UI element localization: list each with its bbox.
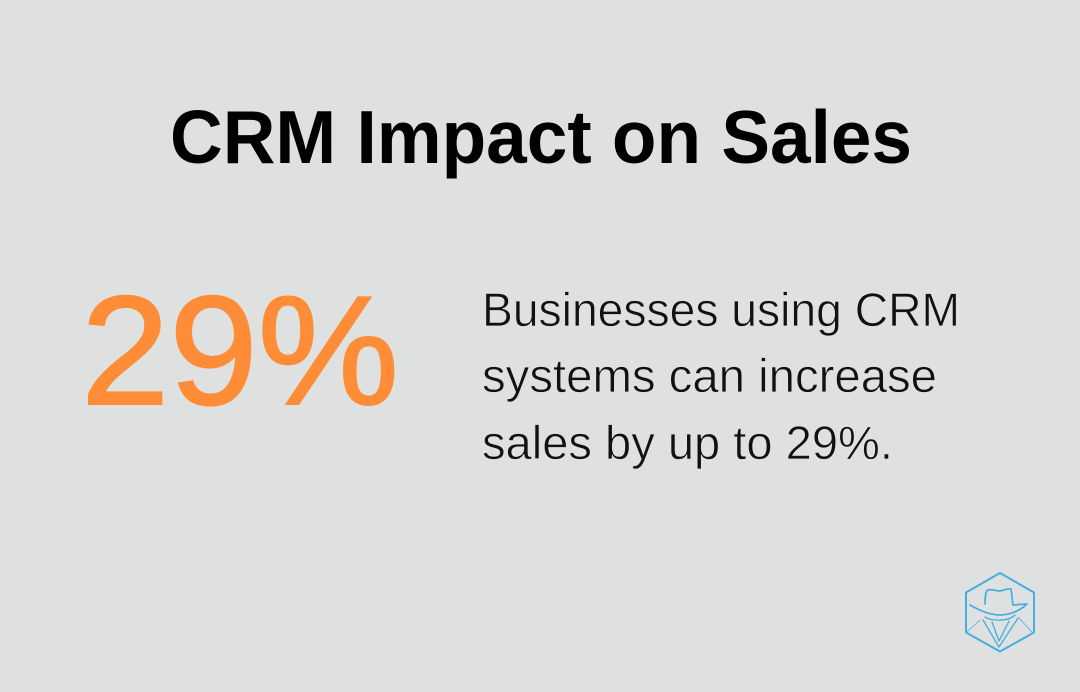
icon: logo hexagon with spy hat: [966, 573, 1034, 652]
description text: sales by up to 29%.: [482, 416, 893, 469]
big stat: 29%: 29%: [81, 264, 399, 437]
description text: systems can increase: [482, 349, 937, 402]
description text: Businesses using CRM: [482, 283, 960, 336]
title: CRM Impact on Sales: [170, 95, 912, 179]
description text: [482, 283, 960, 469]
